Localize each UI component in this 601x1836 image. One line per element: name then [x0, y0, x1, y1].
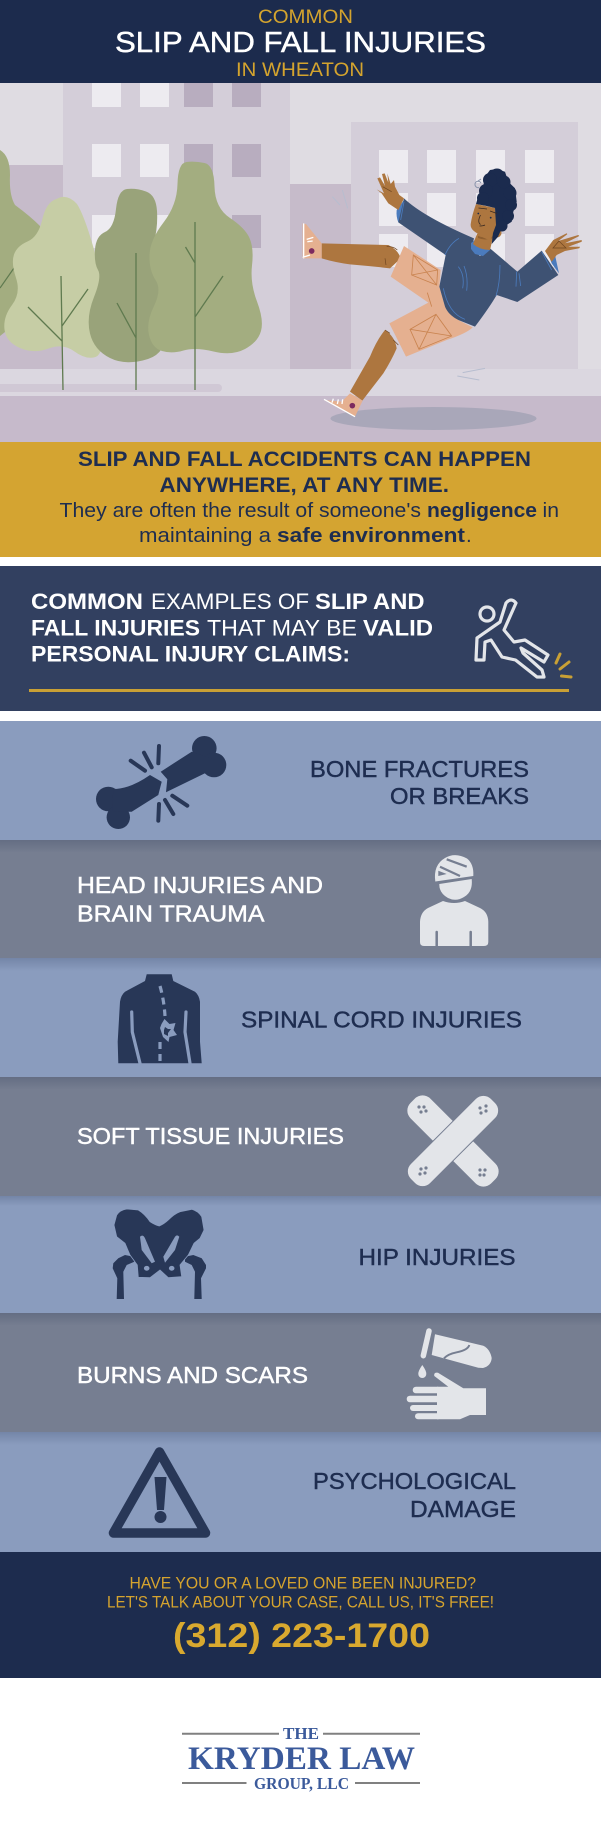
- title: in wheaton: IN WHEATON: [236, 59, 364, 81]
- illustration: person slipping on a city street: [0, 83, 601, 442]
- logo: the kryder law group: THE: [283, 1724, 319, 1743]
- label: bone fractures: OR BREAKS: [390, 783, 529, 809]
- ground shadow: [330, 407, 536, 430]
- sidewalk: [0, 369, 601, 396]
- icon: chemical on hand: [407, 1331, 492, 1419]
- logo: the kryder law group: [182, 1724, 420, 1793]
- call to action text: [107, 1573, 494, 1611]
- title: common: COMMON: [258, 6, 353, 28]
- band body text: maintaining a: [139, 524, 272, 547]
- label: bone fractures: BONE FRACTURES: [310, 756, 529, 782]
- trees: [0, 150, 262, 390]
- logo: the kryder law group: GROUP, LLC: [254, 1774, 349, 1793]
- band body text: They are often the result of someone's: [60, 499, 421, 522]
- building: right: [351, 122, 578, 369]
- logo: the kryder law group: KRYDER LAW: [188, 1741, 415, 1777]
- panel heading text: COMMON: [31, 589, 143, 614]
- band body text: .: [466, 524, 472, 547]
- panel: common examples heading: [0, 566, 601, 711]
- label: psychological damage: [313, 1468, 516, 1522]
- gold message band: [0, 442, 601, 557]
- band body text: in: [542, 499, 559, 522]
- label: hip: HIP INJURIES: [358, 1244, 516, 1270]
- panel heading text: EXAMPLES OF: [151, 589, 309, 614]
- label: spinal cord: SPINAL CORD INJURIES: [241, 1006, 522, 1032]
- icon: broken bone: [96, 736, 226, 829]
- band heading: [78, 448, 531, 497]
- icon: head bandage: [420, 855, 488, 946]
- hair: [476, 168, 517, 244]
- band body text: [60, 499, 559, 547]
- hair clip and facial features: [475, 179, 497, 226]
- call to action text: HAVE YOU OR A LOVED ONE BEEN INJURED?: [130, 1573, 476, 1592]
- band heading: SLIP AND FALL ACCIDENTS CAN HAPPEN: [78, 448, 531, 471]
- label: soft tissue: SOFT TISSUE INJURIES: [77, 1123, 344, 1149]
- label: burns: BURNS AND SCARS: [77, 1362, 308, 1388]
- title: slip and fall injuries: SLIP AND FALL INJURIES: [115, 27, 486, 59]
- phone number: (312) 223-1700: [173, 1617, 430, 1655]
- panel heading text: PERSONAL INJURY CLAIMS:: [31, 642, 350, 666]
- building: back left: [0, 165, 63, 369]
- gold divider: [29, 689, 569, 692]
- icon: pelvis: [113, 1209, 206, 1299]
- panel heading text: [31, 589, 433, 666]
- panel heading text: SLIP AND: [315, 589, 424, 614]
- label: head injuries: [77, 872, 323, 926]
- row: bone fractures: [0, 721, 601, 840]
- band body text: negligence: [427, 499, 537, 522]
- row: soft tissue injuries: [0, 1077, 601, 1196]
- row: head injuries: [0, 840, 601, 958]
- right hand: [545, 233, 582, 262]
- label: psychological damage: DAMAGE: [410, 1496, 516, 1522]
- header banner: [0, 0, 601, 83]
- face: [471, 204, 497, 240]
- road: [0, 396, 601, 442]
- neck and collar: [471, 240, 490, 256]
- band body text: safe environment: [277, 524, 465, 547]
- label: bone fractures: [310, 756, 529, 809]
- panel heading text: FALL INJURIES: [31, 616, 200, 640]
- row: spinal cord injuries: [0, 958, 601, 1077]
- row: burns and scars: [0, 1313, 601, 1432]
- panel heading text: VALID: [363, 616, 433, 640]
- icon: crossed bandages: [403, 1091, 503, 1191]
- label: head injuries: BRAIN TRAUMA: [77, 900, 265, 926]
- icon: warning triangle: [114, 1452, 206, 1533]
- row: psychological damage: [0, 1432, 601, 1552]
- icon: spine and back: [118, 974, 202, 1063]
- label: psychological damage: PSYCHOLOGICAL: [313, 1468, 516, 1494]
- building: tall left: [63, 83, 290, 369]
- call to action footer: [0, 1552, 601, 1678]
- label: head injuries: HEAD INJURIES AND: [77, 872, 323, 898]
- band heading: ANYWHERE, AT ANY TIME.: [160, 474, 449, 497]
- row: hip injuries: [0, 1196, 601, 1313]
- call to action text: LET'S TALK ABOUT YOUR CASE, CALL US, IT'S FREE!: [107, 1592, 494, 1611]
- panel heading text: THAT MAY BE: [207, 616, 357, 640]
- falling person: [303, 168, 582, 417]
- icon: falling figure: [476, 600, 571, 677]
- building: low middle: [290, 184, 351, 369]
